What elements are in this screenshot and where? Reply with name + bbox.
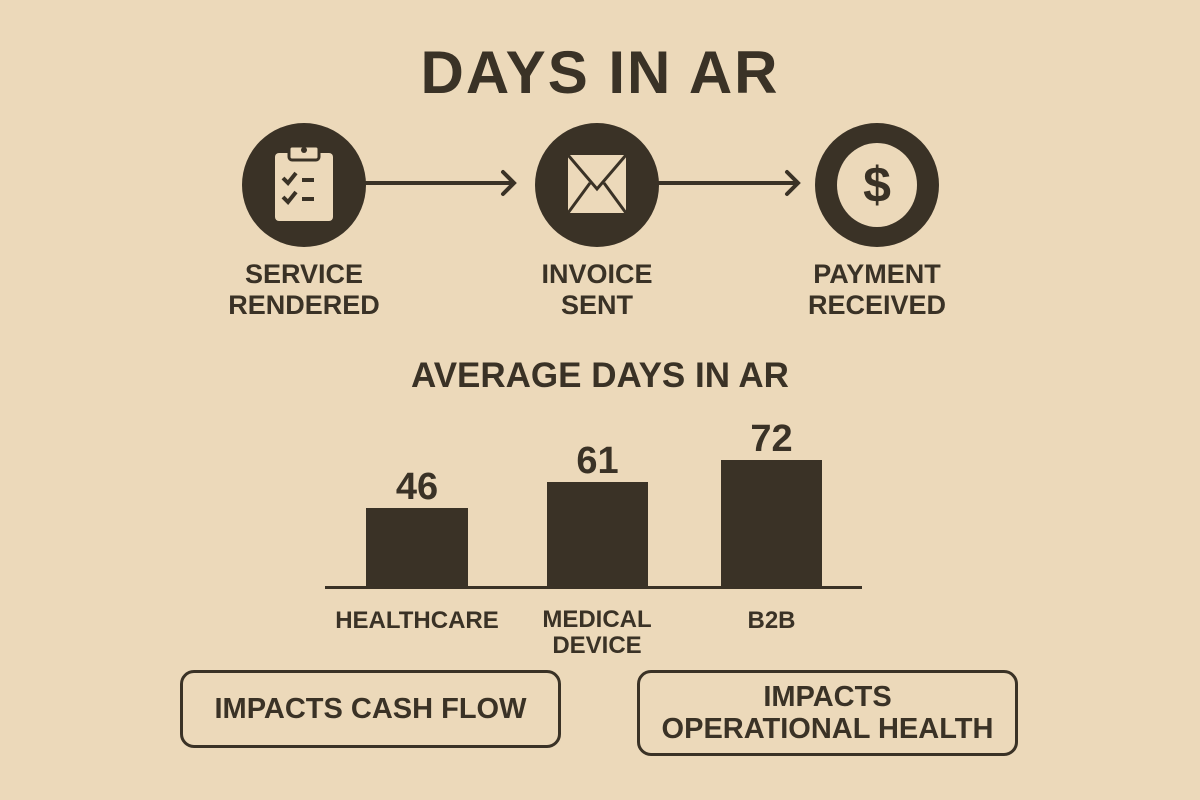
label: payment received: RECEIVED <box>808 290 946 320</box>
bar chart: MEDICAL <box>542 606 652 633</box>
label: invoice sent <box>541 259 653 320</box>
icon: dollar <box>815 123 939 247</box>
bar: b2b <box>721 460 822 588</box>
value 61: 61 <box>576 440 619 482</box>
label: invoice sent: INVOICE <box>541 259 653 289</box>
callout: cash flow <box>180 670 561 748</box>
arrow 1 <box>366 172 514 194</box>
label: service rendered: RENDERED <box>228 290 380 320</box>
category labels: HEALTHCARE <box>335 607 499 634</box>
icon: envelope <box>535 123 659 247</box>
callout: operational health: OPERATIONAL HEALTH <box>662 713 993 745</box>
label: payment received <box>808 259 946 320</box>
arrow 2 <box>659 172 798 194</box>
callout: operational health <box>637 670 1018 756</box>
label: service rendered: SERVICE <box>245 259 363 289</box>
bar: medical device <box>547 482 648 588</box>
bar chart <box>325 418 862 659</box>
value 46: 46 <box>396 466 438 508</box>
chart heading: AVERAGE DAYS IN AR <box>411 356 789 395</box>
bar chart: B2B <box>747 607 796 634</box>
callout: cash flow: IMPACTS CASH FLOW <box>214 693 526 725</box>
bar chart: DEVICE <box>552 632 642 659</box>
process flow <box>242 123 939 247</box>
bar: healthcare <box>366 508 468 588</box>
label: service rendered <box>228 259 380 320</box>
value 72: 72 <box>750 418 793 460</box>
label: invoice sent: SENT <box>561 290 633 320</box>
label: payment received: PAYMENT <box>813 259 941 289</box>
icon: dollar: $ <box>863 157 891 213</box>
callout: operational health: IMPACTS <box>763 681 892 713</box>
icon: clipboard <box>242 123 366 247</box>
title: DAYS IN AR <box>421 39 779 106</box>
